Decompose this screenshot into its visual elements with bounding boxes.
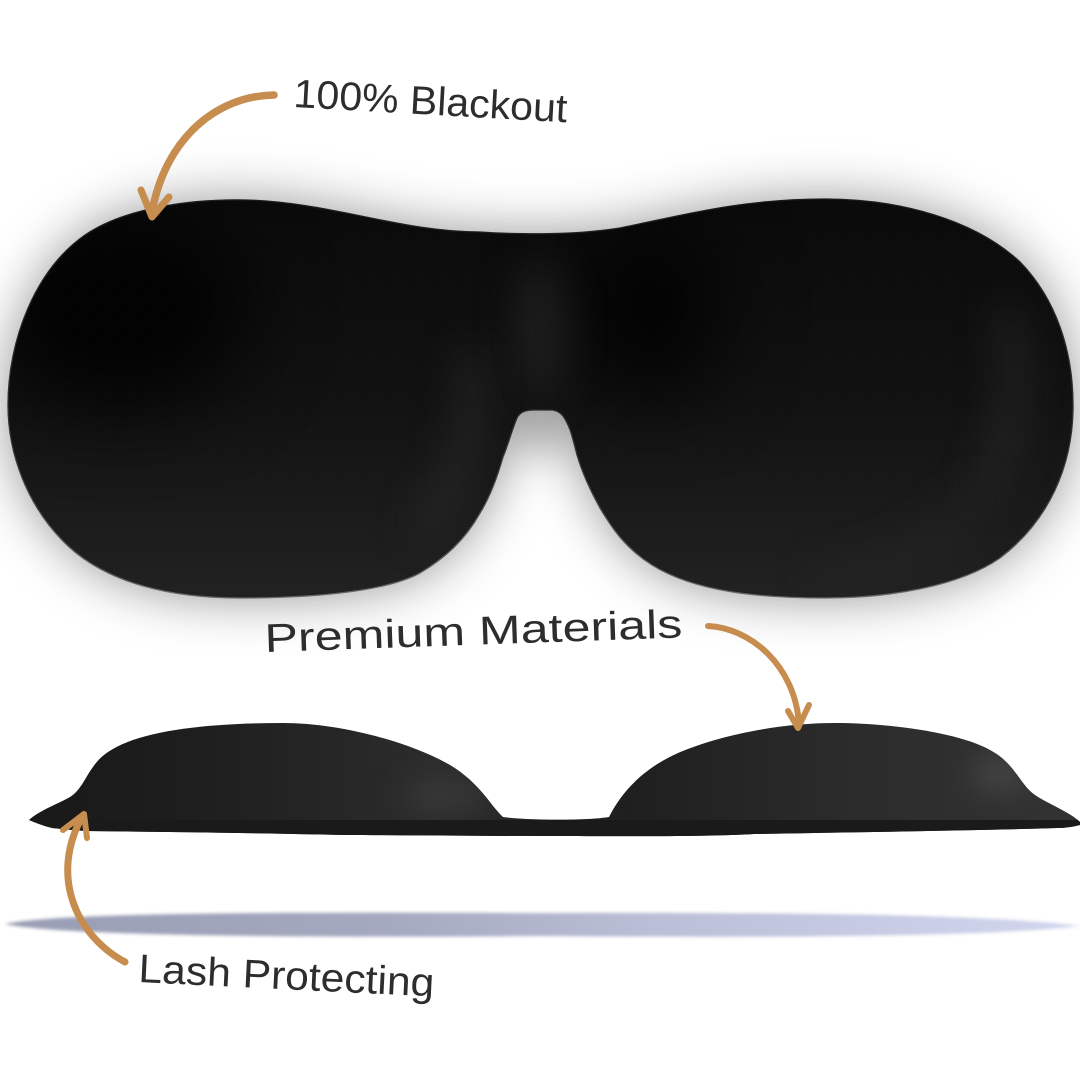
label: Premium Materials: Premium Materials xyxy=(264,602,683,661)
notch shadow xyxy=(515,402,567,458)
mask edge line xyxy=(8,199,1073,598)
label: Lash Protecting: Lash Protecting xyxy=(138,947,435,1005)
panel: front view of sleep mask xyxy=(0,190,1080,610)
label: 100% Blackout: 100% Blackout xyxy=(292,72,569,131)
left cup inner rim highlight xyxy=(462,374,481,424)
panel: side view of sleep mask xyxy=(29,723,1080,836)
right rim highlight xyxy=(1001,332,1020,442)
right lobe dark area xyxy=(602,270,699,380)
arrow: Premium Materials xyxy=(708,626,809,728)
fabric weave xyxy=(0,190,1080,610)
bridge lightness xyxy=(517,275,566,376)
floor shadow xyxy=(5,913,1080,937)
left cup highlight xyxy=(427,784,472,806)
left lobe dark area xyxy=(18,248,226,405)
mask drop shadow xyxy=(8,199,1073,598)
lower band xyxy=(29,820,1080,836)
arrow: 100% Blackout xyxy=(141,95,274,217)
arrow: Lash Protecting xyxy=(63,814,125,962)
right cup highlight xyxy=(972,761,1028,785)
lower right rim highlight xyxy=(820,490,980,578)
side view body xyxy=(29,723,1080,836)
